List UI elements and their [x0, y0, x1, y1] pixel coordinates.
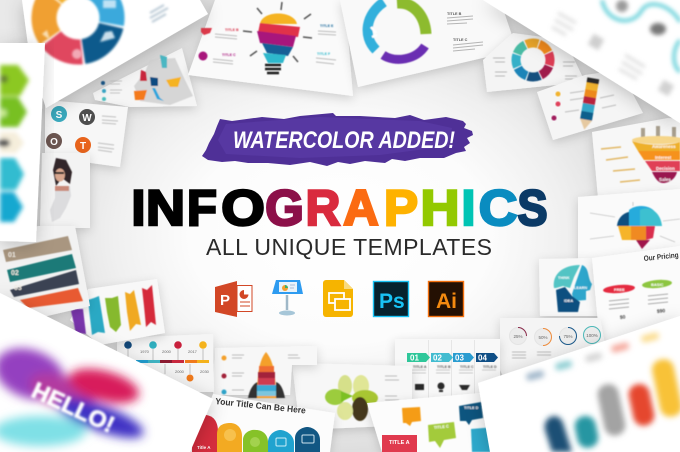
capsule: title A — [192, 415, 218, 452]
item: title E: TITLE F — [317, 52, 331, 56]
icon: rocket — [248, 352, 285, 398]
item: title B: TITLE B — [225, 28, 239, 32]
title: infographics: C — [479, 180, 517, 236]
panel: bottom-right blurred bars sheet — [478, 316, 680, 452]
chart: blurred ring — [30, 0, 126, 66]
chart: timeline: 2000 — [175, 369, 185, 374]
text: step titles: TITLE B — [437, 365, 451, 369]
chart: brush columns — [71, 285, 156, 335]
icon: powerpoint: P — [220, 292, 230, 309]
capsule: title A: Title A — [197, 445, 211, 450]
text: step titles: TITLE C — [460, 365, 474, 369]
icon: S circle: S — [56, 110, 63, 121]
chart: ribbons — [3, 236, 83, 308]
icon: photoshop: Ps — [379, 290, 405, 313]
text: step titles: TITLE D — [483, 365, 497, 369]
tag: 04: 04 — [478, 354, 487, 362]
title: infographics: G — [265, 180, 304, 236]
panel: photo — [40, 153, 90, 228]
title: infographics: I — [132, 180, 145, 236]
panel: numbered steps — [395, 339, 500, 405]
title: infographics: P — [384, 179, 418, 236]
item: basic plan: $90 — [657, 308, 666, 315]
panel: rocket — [213, 346, 317, 398]
panel: lightbulb — [188, 0, 353, 96]
tag: 01: 01 — [410, 354, 419, 362]
panel: ribbons — [0, 226, 90, 320]
panel: hexagon ring — [483, 33, 585, 92]
icon: keynote — [272, 280, 303, 316]
text: watercolor added: WATERCOLOR ADDED! — [233, 127, 455, 154]
text: step titles — [412, 365, 497, 373]
chart: funnel: Interest — [655, 155, 672, 160]
title: infographics: I — [462, 180, 475, 236]
chart: segmented ring — [511, 38, 555, 82]
panel: top-left blurred ring sheet — [0, 0, 208, 108]
title: infographics: N — [146, 181, 185, 237]
icon: head — [554, 265, 592, 312]
title: infographics: A — [343, 181, 379, 236]
chart: funnel: Sales — [659, 177, 671, 182]
item: title E — [316, 24, 336, 64]
chart: timeline: 1970 — [140, 349, 150, 354]
bubble: green: TITLE C — [434, 423, 449, 430]
icon: powerpoint — [215, 281, 252, 317]
panel: funnel — [592, 118, 680, 198]
icons: steps — [415, 382, 470, 392]
title: infographics: F — [187, 181, 217, 236]
banner: watercolor brush stroke — [202, 113, 473, 166]
item: basic plan: BASIC — [651, 282, 664, 287]
text: title D: TITLE C — [453, 38, 468, 42]
panel: left blurred sheet — [0, 43, 45, 242]
chart: ribbons: 03 — [14, 285, 22, 292]
icon: illustrator — [428, 282, 464, 316]
title: infographics: H — [421, 181, 459, 237]
chart: blurred capsule bars — [526, 332, 680, 452]
chart: ribbons: 01 — [8, 252, 16, 259]
item: title E: TITLE E — [320, 24, 334, 28]
panel: SWOT — [45, 100, 128, 167]
item: basic plan — [642, 279, 672, 315]
icon: head: IDEA — [564, 299, 573, 303]
chart: funnel — [601, 126, 680, 183]
panel: speech bubbles — [367, 393, 498, 452]
panel: your title — [190, 394, 335, 452]
capsule: dark blue — [295, 427, 320, 452]
panel: puzzle brain — [578, 189, 680, 260]
panel: europe map — [93, 48, 197, 107]
text: step titles: TITLE A — [413, 365, 427, 369]
item: free plan: FREE — [614, 287, 625, 292]
title: infographics — [132, 179, 548, 237]
icon: W circle: W — [82, 113, 92, 124]
panel: top-right blurred sheet — [483, 0, 680, 123]
chart: watercolor ring — [368, 2, 426, 59]
icon: google slides — [323, 280, 353, 317]
text: hello: HELLO! — [28, 377, 119, 438]
chart: blurred curve — [552, 0, 680, 96]
title: infographics: O — [221, 181, 265, 236]
panel: flower — [292, 363, 412, 430]
text: title D: TITLE B — [447, 12, 462, 16]
capsule: teal — [268, 430, 294, 452]
text: title D — [447, 12, 483, 51]
panel: bottom-left blurred sheet with splash — [0, 293, 213, 452]
bubble: dark blue: TITLE D — [464, 406, 479, 410]
chart: timeline: 2000 — [162, 349, 172, 354]
icon: head: LEARN — [574, 286, 587, 290]
chart: percent 75: 75% — [563, 334, 573, 339]
capsule: yellow — [217, 423, 242, 452]
item: title C — [198, 52, 236, 64]
chart: timeline: 2017 — [188, 349, 198, 354]
subtitle: all unique templates: ALL UNIQUE TEMPLATES — [206, 234, 492, 260]
icon: photoshop — [374, 282, 408, 316]
item: free plan — [603, 284, 635, 321]
panel: timeline — [117, 334, 214, 392]
chart: funnel: Awareness — [652, 144, 676, 149]
item: free plan: $0 — [620, 315, 626, 321]
chart: timeline: 2030 — [200, 369, 210, 374]
icon: illustrator: Ai — [436, 290, 457, 313]
icon: O circle: O — [50, 137, 58, 148]
icon: lightbulb — [243, 2, 312, 73]
tag: 03: 03 — [455, 354, 464, 362]
icon stack: blurred hexagons — [0, 65, 29, 222]
chart: ribbons: 02 — [11, 270, 19, 277]
bubble: orange — [402, 407, 421, 426]
panel: percentage circles — [500, 318, 605, 390]
title: infographics: R — [306, 181, 340, 236]
illustration: watercolor splash — [0, 339, 148, 446]
chart: funnel: Decision — [656, 166, 675, 171]
icon: head: THINK — [558, 276, 570, 280]
icon: puzzle head — [590, 202, 680, 249]
chart: percent 25: 25% — [513, 334, 523, 339]
bubble: teal — [471, 427, 498, 452]
panel: brush columns — [70, 279, 165, 345]
icon: T circle: T — [80, 141, 86, 152]
chart: timeline — [124, 341, 210, 382]
chart: petals — [325, 375, 378, 421]
icon: pencil — [578, 77, 599, 131]
panel: brush ring — [340, 0, 517, 87]
panel: head — [539, 258, 600, 316]
bubble: red title A: TITLE A — [389, 440, 410, 446]
heading: your title: Your Title Can Be Here — [215, 396, 306, 416]
title: infographics: S — [517, 181, 548, 237]
item: title C: TITLE C — [222, 53, 236, 57]
chart: percent 50: 50% — [538, 335, 548, 340]
capsule: green — [243, 430, 268, 452]
panel: pencil — [537, 70, 643, 140]
chart: percent 100: 100% — [586, 333, 598, 338]
panel: pricing — [592, 246, 680, 345]
item: title B — [201, 28, 239, 39]
tag: 02: 02 — [433, 354, 442, 362]
